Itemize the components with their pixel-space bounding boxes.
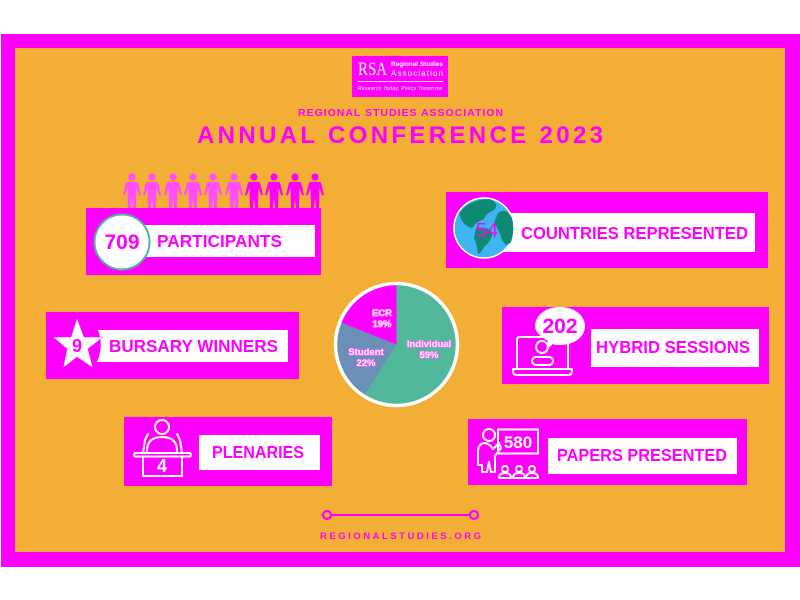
- bursary label: BURSARY WINNERS: [109, 336, 278, 356]
- panel: countries: [446, 192, 768, 268]
- panel: bursary winners: [46, 312, 299, 379]
- logo: Research Today, Policy Tomorrow: [358, 86, 442, 92]
- pie chart: [336, 284, 458, 406]
- icon: star with count: 9: [72, 336, 82, 356]
- logo: RSA: [358, 59, 387, 80]
- panel: plenaries: [124, 417, 332, 486]
- plenaries label: PLENARIES: [212, 442, 304, 462]
- logo: Regional Studies: [391, 62, 444, 68]
- icon: globe with count: 54: [476, 220, 498, 242]
- pie labels: [348, 308, 451, 369]
- participants label: PARTICIPANTS: [157, 231, 282, 251]
- pie labels: ECR: [372, 308, 392, 319]
- icon: speaker at podium: [134, 420, 191, 476]
- slice: student: [337, 323, 396, 395]
- pie labels: 59%: [419, 350, 439, 361]
- hybrid label: HYBRID SESSIONS: [596, 337, 750, 357]
- icon: globe with count: [454, 198, 514, 258]
- pie labels: 22%: [356, 358, 376, 369]
- icon: speaker at podium: 4: [157, 456, 167, 476]
- icon: star with count: [53, 318, 103, 368]
- logo: [352, 56, 448, 97]
- participants count circle: 709: [104, 231, 140, 254]
- panel: participants: [86, 208, 321, 275]
- pie labels: Student: [348, 347, 385, 358]
- people icons: [123, 173, 324, 208]
- footer connector: [323, 511, 478, 519]
- papers label: PAPERS PRESENTED: [557, 445, 727, 465]
- icon: laptop with speech bubble: 202: [542, 315, 578, 338]
- countries label: COUNTRIES REPRESENTED: [521, 223, 748, 243]
- subtitle: REGIONAL STUDIES ASSOCIATION: [298, 107, 503, 119]
- panel: hybrid sessions: [502, 307, 769, 384]
- icon: presenter with board: 580: [504, 433, 532, 452]
- website: REGIONALSTUDIES.ORG: [320, 531, 481, 542]
- icon: laptop with speech bubble: [513, 307, 585, 375]
- pie labels: 19%: [372, 319, 392, 330]
- slice: ECR: [342, 285, 396, 344]
- logo: Association: [391, 69, 443, 78]
- pie labels: Individual: [407, 339, 451, 350]
- participants count circle: [94, 214, 150, 270]
- icon: presenter with board: [478, 429, 538, 478]
- panel: papers presented: [468, 419, 747, 485]
- title: ANNUAL CONFERENCE 2023: [197, 122, 603, 149]
